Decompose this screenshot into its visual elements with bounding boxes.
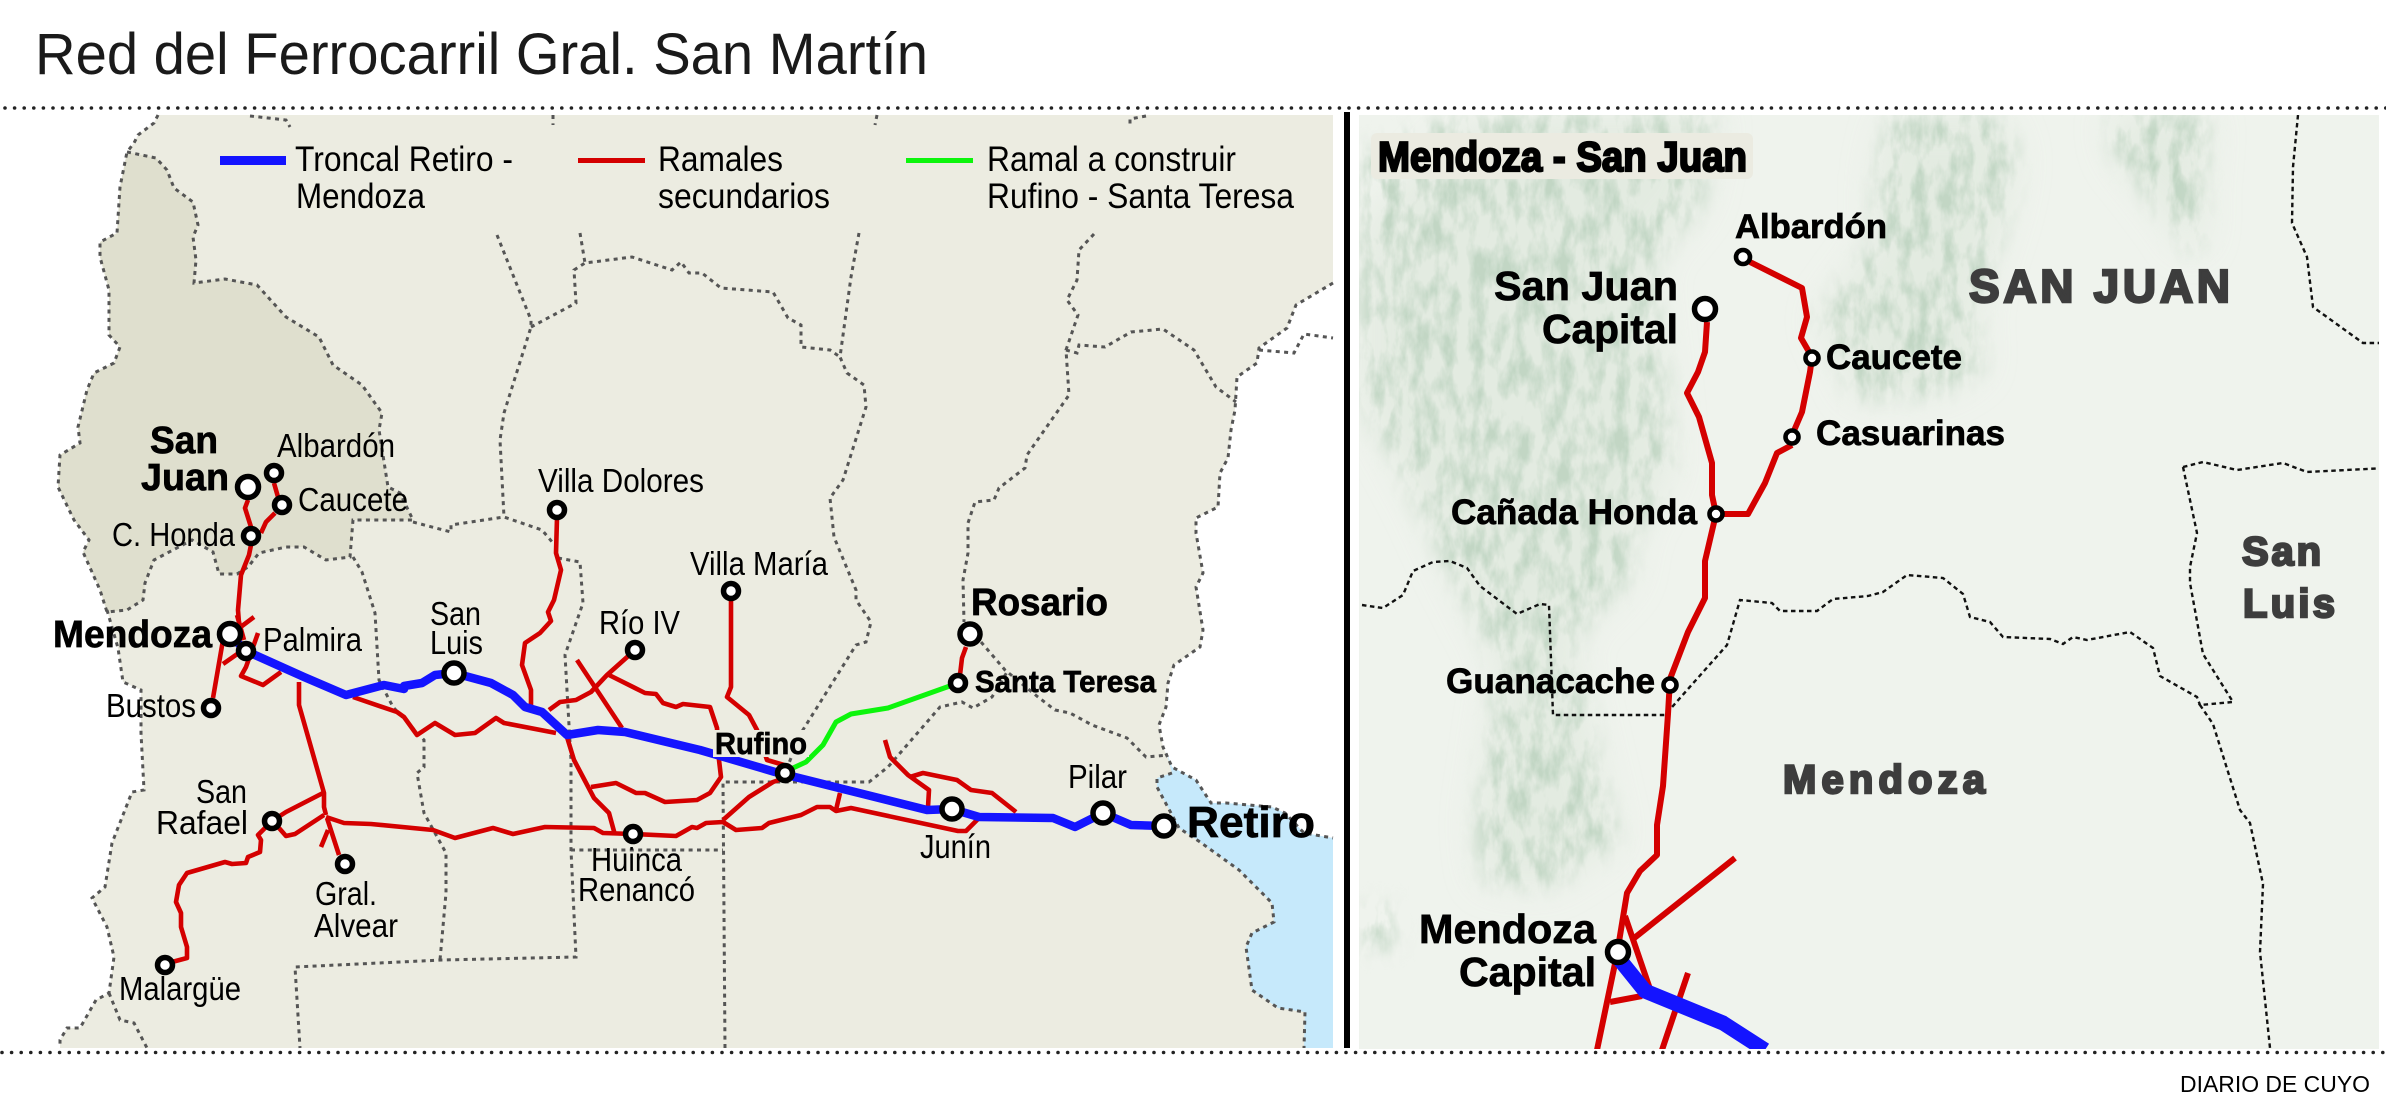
city labels detail: San Juan <box>1494 263 1678 309</box>
city labels detail: Cañada Honda <box>1451 493 1698 532</box>
legend: trunk text <box>295 140 513 216</box>
city labels: Juan <box>141 457 229 499</box>
province borders detail <box>1362 115 2386 1048</box>
rail lines detail <box>1597 262 1812 1050</box>
city labels: Renancó <box>578 871 695 908</box>
water: Río de la Plata <box>1157 750 1333 1048</box>
province names: San <box>2242 530 2321 574</box>
city labels detail: Capital <box>1459 949 1596 995</box>
legend: trunk text: Mendoza <box>296 177 425 216</box>
legend: new branch swatch <box>906 158 973 163</box>
province names <box>1783 260 2335 802</box>
city labels detail: Capital <box>1542 306 1678 352</box>
legend: new branch text <box>987 140 1294 216</box>
city labels: Retiro <box>1187 798 1315 847</box>
city labels: Gral. <box>315 875 377 912</box>
city labels: Malargüe <box>119 970 241 1007</box>
city labels detail: Guanacache <box>1446 662 1655 701</box>
city labels: Junín <box>920 828 991 865</box>
city labels: Rosario <box>971 582 1108 624</box>
highlighted province: San Juan <box>58 152 413 612</box>
province names: Mendoza <box>1783 758 1986 802</box>
city labels detail: Albardón <box>1735 208 1887 246</box>
city labels: Caucete <box>298 481 408 518</box>
city labels: Pilar <box>1068 758 1127 795</box>
city labels: Villa María <box>690 545 829 582</box>
legend <box>220 140 1294 216</box>
station markers <box>158 466 1174 972</box>
city labels: Albardón <box>277 427 395 464</box>
province names: Luis <box>2243 582 2335 626</box>
city labels: Huinca <box>591 841 683 878</box>
title: Red del Ferrocarril Gral. San Martín <box>35 22 928 87</box>
label patch behind Rufino <box>713 730 809 757</box>
legend: secondary text: Ramales <box>658 140 783 179</box>
legend: trunk text: Troncal Retiro - <box>295 140 513 179</box>
city labels: Santa Teresa <box>975 664 1157 699</box>
land base <box>58 115 1333 1048</box>
city labels detail: Mendoza <box>1419 906 1597 952</box>
city labels detail: Casuarinas <box>1816 414 2005 453</box>
city labels: San <box>430 595 481 632</box>
green branch to build <box>793 683 958 768</box>
province borders <box>60 115 1333 1048</box>
city labels detail: Caucete <box>1826 338 1962 377</box>
city labels: San <box>150 420 218 462</box>
station markers detail <box>1608 250 1818 962</box>
city labels detail <box>1419 208 2005 995</box>
legend: secondary swatch <box>578 158 645 163</box>
map title with halo: Mendoza - San Juan <box>1378 133 1747 180</box>
panel: national rail map <box>53 115 1333 1048</box>
city labels: Rufino <box>715 726 807 761</box>
city labels: Villa Dolores <box>538 462 704 499</box>
city labels: Alvear <box>314 907 398 944</box>
city labels: Mendoza <box>53 614 213 656</box>
divider <box>1344 112 1350 1048</box>
city labels <box>53 420 1315 1007</box>
legend: secondary text <box>658 140 830 216</box>
legend: secondary text: secundarios <box>658 177 830 216</box>
panel: Mendoza - San Juan detail map <box>1359 115 2386 1050</box>
city labels: Luis <box>430 624 483 661</box>
legend: new branch text: Rufino - Santa Teresa <box>987 177 1294 216</box>
city labels: Río IV <box>599 604 680 641</box>
city labels: C. Honda <box>112 516 236 553</box>
legend: new branch text: Ramal a construir <box>987 140 1236 179</box>
city labels: Bustos <box>106 687 196 724</box>
legend: trunk swatch <box>220 156 286 165</box>
city labels: Rafael <box>156 804 248 841</box>
source credit: DIARIO DE CUYO <box>2180 1071 2370 1097</box>
terrain background <box>1359 115 2379 1049</box>
province names: SAN JUAN <box>1969 260 2230 312</box>
secondary branch lines <box>172 483 1016 962</box>
city labels: Palmira <box>263 621 363 658</box>
city labels: San <box>196 773 247 810</box>
trunk line Retiro - Mendoza <box>230 635 1163 827</box>
